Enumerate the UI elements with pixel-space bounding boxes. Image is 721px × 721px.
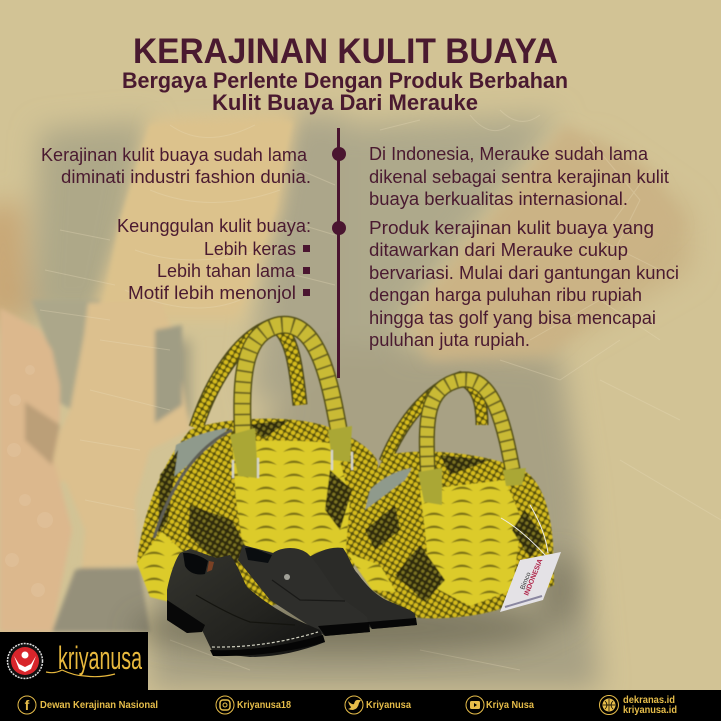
right text: products: bervariasi. Mulai dari gantungan kunci (369, 262, 679, 283)
subtitle: Kulit Buaya Dari Merauke (212, 90, 478, 115)
price tag (500, 505, 561, 612)
logo wordmark: kriyanusa (58, 640, 142, 676)
icon: dekranas emblem (8, 644, 42, 678)
logo block (0, 632, 148, 690)
product shadow (130, 554, 578, 654)
youtube: Kriya Nusa (486, 700, 534, 711)
title: KERAJINAN KULIT BUAYA (133, 32, 558, 71)
left text: intro: diminati industri fashion dunia. (61, 166, 311, 187)
twitter (345, 696, 411, 714)
photo: black leather shoes (167, 545, 417, 657)
youtube (466, 696, 534, 714)
instagram (216, 696, 291, 714)
right text: products: Produk kerajinan kulit buaya yang (369, 217, 654, 238)
right text: Merauke: buaya berkualitas internasional. (369, 188, 628, 209)
left text: intro (41, 144, 311, 187)
website (600, 695, 677, 716)
photo: large yellow python handbag (137, 325, 378, 610)
price tag: INDONESIA (523, 558, 544, 597)
back shoe (307, 548, 417, 629)
website: kriyanusa.id (623, 705, 677, 716)
right text: Merauke: dikenal sebagai sentra kerajinan kulit (369, 166, 669, 187)
facebook: f (25, 697, 30, 713)
timeline divider with dots (332, 128, 346, 378)
subtitle (122, 68, 568, 115)
price tag: Bimco (519, 571, 533, 591)
middle shoe (238, 545, 370, 636)
title (122, 32, 568, 115)
left text: advantages list: Keunggulan kulit buaya: (117, 215, 311, 236)
right text: products: puluhan juta rupiah. (369, 329, 530, 350)
right text: Merauke (369, 143, 669, 209)
right text: products: ditawarkan dari Merauke cukup (369, 239, 628, 260)
facebook: Dewan Kerajinan Nasional (40, 700, 158, 711)
front shoe (167, 549, 325, 657)
right text: Merauke: Di Indonesia, Merauke sudah lama (369, 143, 649, 164)
subtitle: Bergaya Perlente Dengan Produk Berbahan (122, 68, 568, 93)
right text: products (369, 217, 679, 350)
right text: products: dengan harga puluhan ribu rupiah (369, 284, 642, 305)
right text: products: hingga tas golf yang bisa mencapai (369, 307, 656, 328)
left text: advantages list: Motif lebih menonjol (128, 282, 296, 303)
left text: advantages list (117, 215, 311, 303)
instagram: Kriyanusa18 (237, 700, 291, 711)
footer bar (0, 632, 721, 721)
twitter: Kriyanusa (366, 700, 411, 711)
left text: advantages list: Lebih tahan lama (157, 260, 296, 281)
left text: advantages list: Lebih keras (204, 238, 296, 259)
photo: small yellow python handbag (347, 378, 554, 618)
logo wordmark (46, 640, 142, 677)
left text: intro: Kerajinan kulit buaya sudah lama (41, 144, 308, 165)
website: dekranas.id (623, 695, 675, 706)
facebook (18, 696, 158, 714)
